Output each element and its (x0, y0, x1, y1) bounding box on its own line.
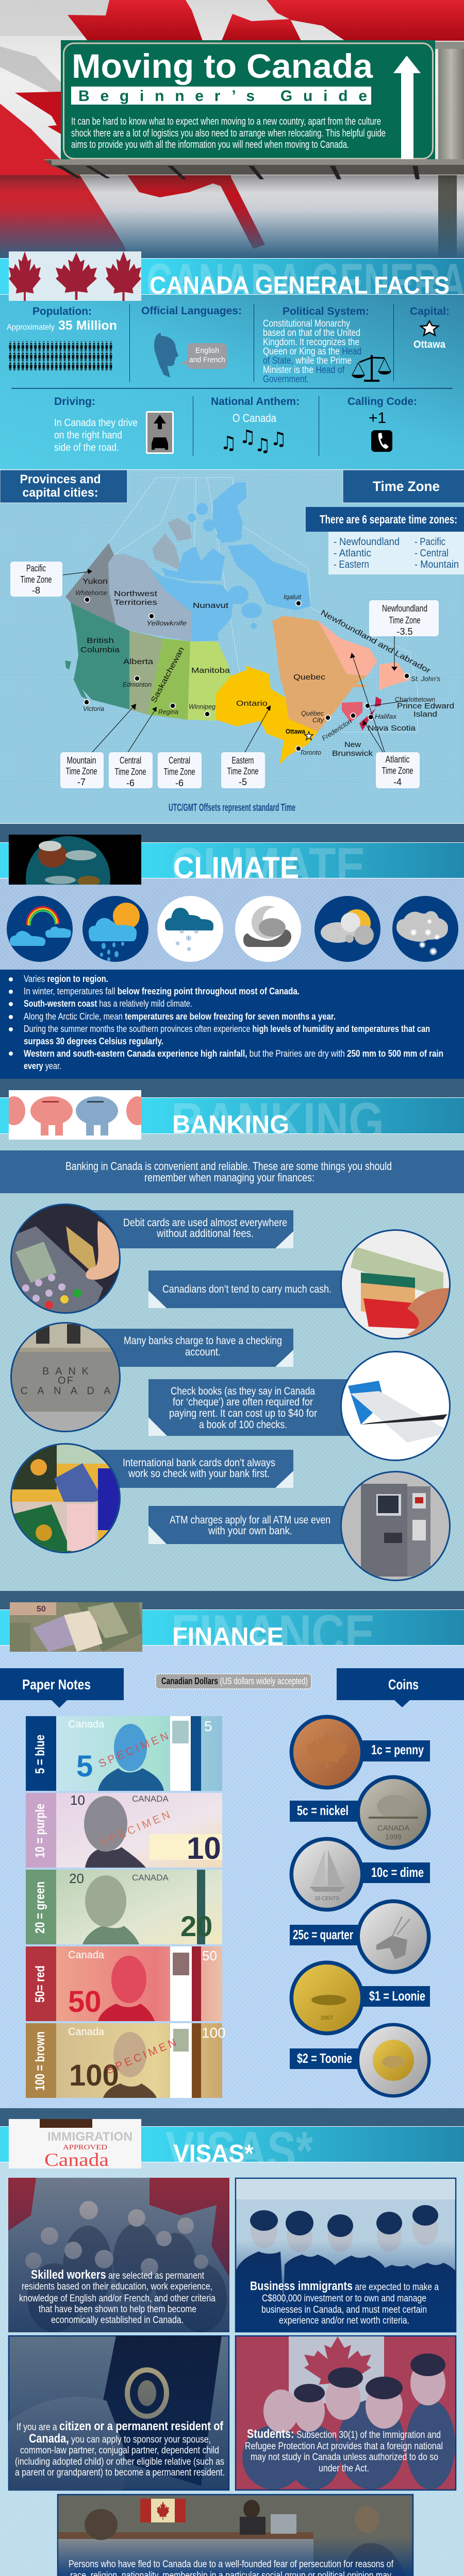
callout: newfoundland time zone (369, 600, 439, 637)
card: refugee claim (57, 2494, 413, 2576)
banknote: 5 dollar: Canada (68, 1719, 105, 1730)
map labels: provinces: Saskatchewan (150, 646, 186, 704)
photo: bank of canada building: OF (58, 1375, 73, 1386)
callout: mountain time zone: -7 (77, 777, 86, 787)
icon: scales (352, 355, 391, 382)
map labels: provinces: New (344, 740, 361, 749)
map labels: capital cities: Halifax (375, 713, 397, 720)
banking tip: cash: Canadians don’t tend to carry much cash. (162, 1283, 332, 1295)
fact: official languages: English (195, 346, 219, 355)
heading: provinces and capital cities: capital cities: (23, 486, 98, 500)
fact: official languages: and French (189, 355, 225, 364)
callout: eastern time zone: -5 (239, 777, 247, 787)
map labels: capital cities: Iqaluit (284, 593, 302, 601)
header image: banknotes (10, 1602, 142, 1652)
card: business immigrants: C$800,000 investment or to own and manage (262, 2293, 426, 2304)
callout: newfoundland time zone: Time Zone (389, 615, 421, 625)
fact: calling code: Calling Code: (347, 396, 417, 408)
intro text (71, 116, 386, 150)
photo: check book (340, 1351, 451, 1461)
coin: penny (290, 1715, 430, 1790)
banking tip: check books: paying rent. It can cost up to $40 for (169, 1408, 317, 1419)
card: skilled workers: that have been shown to help them become (39, 2304, 196, 2315)
title: Moving to Canada (72, 47, 373, 85)
banknote: 50 dollar: 50 (68, 1985, 102, 2019)
banknote: 5 dollar: 5 (204, 1718, 212, 1734)
climate facts list: Western and south-eastern Canada experience high rainfall, but the Prairies are dry with 250 mm to 500 mm of rain (24, 1048, 443, 1059)
map labels: capital cities: Yellowknife (146, 619, 187, 627)
card: business immigrants: businesses in Canada, and must meet certain (261, 2304, 427, 2315)
icon: snow cloud: ✻ (186, 934, 192, 942)
card: business immigrants: Business immigrants are expected to make a (250, 2279, 439, 2293)
heading: coins (337, 1668, 464, 1707)
map labels: provinces: Yukon (82, 577, 108, 586)
panel: provinces and time zone map (0, 469, 464, 824)
banknote: 20 dollar: 20 (69, 1871, 84, 1886)
callout: eastern time zone: Time Zone (227, 766, 259, 776)
map labels: capital cities (75, 589, 440, 756)
climate facts list: every year. (24, 1060, 61, 1071)
banknote: 20 dollar: 20 (180, 1910, 212, 1942)
heading: time zone: Time Zone (373, 479, 440, 494)
banknote: 50 dollar: Canada (68, 1950, 105, 1961)
map labels: capital cities: Ottawa (286, 727, 306, 735)
fact: population: 35 Million (58, 318, 117, 333)
fact: capital: Capital: (410, 306, 450, 317)
coin: quarter (290, 1899, 431, 1974)
fact: political system: Government. (263, 374, 309, 385)
climate facts list: Along the Arctic Circle, mean temperatures are below freezing for seven months a year. (24, 1011, 336, 1022)
sign platform (44, 160, 464, 179)
banknote: 5 dollar (26, 1716, 222, 1791)
fact: population (7, 306, 117, 370)
card: students (236, 2336, 456, 2490)
map labels: provinces: Island (413, 710, 437, 719)
map labels: capital cities: Charlottetown (395, 696, 435, 703)
fact: driving (54, 396, 173, 453)
header image: immigration approved: APPROVED (63, 2144, 107, 2151)
fact: calling code: +1 (369, 410, 386, 427)
banknote: 20 dollar: CANADA (132, 1873, 169, 1883)
arrows: time zone pointers (63, 569, 407, 752)
banking tip: check books: a book of 100 checks. (199, 1419, 287, 1431)
banking tip: debit cards: without additional fees. (156, 1228, 254, 1240)
callout: atlantic time zone: -4 (393, 777, 402, 787)
banknote: 10 dollar: SPECIMEN (98, 1808, 174, 1849)
fact: political system: Queen or King as the Head (263, 346, 361, 357)
banking tip: ATM charges (148, 1471, 451, 1581)
fact: political system: Constitutional Monarchy (263, 318, 350, 329)
coin: toonie: $2 = Toonie (297, 2050, 352, 2066)
banking tip: international cards (10, 1443, 293, 1553)
banking tip: checking account: account. (185, 1346, 221, 1358)
coin: nickel: 1999 (385, 1833, 402, 1841)
callout: central time zone 2 (158, 752, 202, 788)
icon: grey snow cloud: ✺ (429, 946, 438, 958)
banknote: 100 dollar (26, 2023, 226, 2098)
callout: six time zones: - Atlantic (334, 548, 371, 559)
map labels: provinces: Nunavut (193, 601, 229, 610)
panel: Canada general facts (0, 251, 464, 469)
intro text: aims to provide you with all the information you will need when moving to Canada. (71, 139, 349, 150)
map labels: capital cities: Fredericton (320, 717, 353, 742)
climate facts list: South-western coast has a relatively mild climate. (24, 998, 192, 1009)
coin: dime: 10 CENTS (314, 1896, 339, 1902)
banknote: 10 dollar (26, 1792, 222, 1868)
map labels: capital cities: City (312, 716, 324, 724)
icon: snow cloud: ✻ (179, 929, 184, 935)
coin: nickel: 5c = nickel (297, 1803, 349, 1818)
map note: UTC/GMT Offsets represent standard Time (169, 802, 295, 814)
banking tip: checking account (10, 1322, 293, 1432)
banknote: 100 dollar: 100 (202, 2025, 226, 2041)
heading: CLIMATE (173, 851, 299, 885)
callout: central time zone: Time Zone (114, 767, 146, 777)
photo: cash and cards (340, 1229, 451, 1340)
map labels: provinces: Prince Edward (397, 702, 454, 710)
banknote: 20 dollar (26, 1870, 222, 1944)
callout: six time zones (306, 507, 464, 574)
header image: immigration approved (9, 2119, 141, 2170)
callout: central time zone: Central (120, 755, 141, 766)
card: family sponsorship: a parent or grandparent) to become a permanent resident. (15, 2467, 225, 2478)
banknote: 10 dollar: 10 (187, 1831, 221, 1866)
header image: piggy banks (3, 1090, 149, 1140)
header image: maple leaves (9, 251, 141, 301)
panel: visas (0, 2108, 464, 2576)
map labels: capital cities: St. John's (411, 675, 440, 683)
card: skilled workers: knowledge of English and/or French, and other criteria (19, 2293, 216, 2304)
callout: eastern time zone (221, 752, 265, 788)
map labels: capital cities: Winnipeg (189, 703, 216, 710)
banking tip: ATM charges: with your own bank. (208, 1525, 292, 1537)
fact: national anthem: ♫ (220, 433, 237, 454)
banking tip: check books (148, 1351, 451, 1461)
banking tip: debit cards (10, 1204, 293, 1314)
heading: paper notes (0, 1668, 124, 1708)
map labels: provinces: Nova Scotia (368, 724, 416, 733)
banking tip: ATM charges: ATM charges apply for all ATM use even (170, 1514, 330, 1526)
map labels: provinces (80, 577, 454, 758)
callout: mountain time zone: Mountain (67, 755, 96, 766)
coin: nickel (290, 1775, 431, 1850)
callout: atlantic time zone: Time Zone (382, 766, 413, 776)
map labels: provinces: Newfoundland and Labrador (319, 608, 432, 675)
callout: six time zones: - Pacific (415, 536, 445, 548)
intro box (0, 1150, 464, 1193)
card: refugee claim: Persons who have fled to Canada due to a well-founded fear of persecution for reasons of (69, 2559, 394, 2570)
banknote: 50 dollar: 50= red (33, 1965, 47, 2003)
banking tip: check books: Check books (as they say in Canada (171, 1385, 315, 1397)
banking tip: checking account: Many banks charge to have a checking (124, 1335, 282, 1347)
map of Canada (65, 482, 454, 765)
header image: banknotes: 50 (37, 1605, 46, 1614)
fact: official languages: Official Languages: (141, 305, 242, 317)
callout: central time zone: -6 (126, 778, 135, 788)
fact: national anthem: National Anthem: (211, 396, 300, 408)
photo: bank of canada building (10, 1322, 121, 1432)
card: family sponsorship: common-law partner, conjugal partner, dependent child (20, 2445, 219, 2456)
fact: calling code (347, 396, 417, 452)
subtitle: beginner's guide: Beginner’s Guide (78, 88, 367, 105)
callout: six time zones: - Eastern (334, 559, 369, 570)
card: family sponsorship: Canada, you can apply to sponsor your spouse, (29, 2432, 211, 2446)
callout: newfoundland time zone: -3.5 (396, 626, 413, 637)
banking tip: check books: for ‘cheque’) are often required for (173, 1396, 313, 1408)
banking tip: international cards: work so check with your bank first. (128, 1468, 270, 1480)
banknote: 50 dollar: 50 (202, 1948, 217, 1963)
icon: grey snow cloud: ✺ (419, 940, 426, 950)
heading: paper notes: Paper Notes (22, 1676, 91, 1692)
callout: pacific time zone: Time Zone (21, 574, 52, 585)
icon: snow cloud: ✻ (175, 941, 180, 947)
fact: national anthem: O Canada (233, 412, 277, 425)
banknote: 100 dollar: SPECIMEN (105, 2036, 180, 2077)
banknote: 10 dollar: CANADA (132, 1794, 169, 1804)
callout: canadian dollars (156, 1674, 311, 1689)
card: skilled workers: Skilled workers are selected as permanent (31, 2268, 205, 2282)
fact: capital (410, 306, 450, 350)
climate facts list: surpass 30 degrees Celsius regularly. (24, 1036, 163, 1046)
photo: bank of canada building: BANK (42, 1366, 89, 1377)
banknote: 100 dollar: 100 = brown (33, 2031, 47, 2091)
fact: national anthem: ♫ (254, 435, 271, 456)
icon: grey snow cloud: ✺ (410, 928, 417, 938)
icon: grey snow cloud: ✺ (427, 918, 432, 925)
icon: grey snow cloud: ✺ (434, 933, 440, 941)
fact: population: Approximately (7, 323, 55, 332)
icon: sun and rain (82, 896, 148, 962)
banknote: 20 dollar: 20 = green (33, 1882, 47, 1934)
banking tip: debit cards: Debit cards are used almost everywhere (123, 1217, 287, 1229)
callout: six time zones: - Mountain (415, 559, 459, 570)
icon: grey snow cloud (392, 896, 458, 962)
highway sign panel (44, 40, 464, 160)
banknote: 10 dollar: 10 = purple (33, 1804, 47, 1858)
fact: capital: Ottawa (413, 339, 446, 350)
map labels: provinces: Ontario (236, 699, 268, 708)
fact: driving: on the right hand (54, 430, 122, 441)
map labels: provinces: Quebec (293, 673, 326, 682)
callout: atlantic time zone: Atlantic (386, 754, 409, 765)
map labels: capital cities: Victoria (83, 705, 104, 713)
panel: banking (0, 1079, 464, 1591)
coin: penny: 1c = penny (371, 1742, 424, 1757)
climate facts list: During the summer months the southern provinces often experience high levels of humidity and temperatures that can (24, 1023, 430, 1034)
header image: immigration approved: Canada (44, 2149, 109, 2170)
intro box: remember when managing your finances: (144, 1171, 314, 1184)
banknote: 10 dollar: 10 (70, 1792, 85, 1808)
callout: central time zone 2: -6 (175, 778, 184, 788)
header image: immigration approved: IMMIGRATION (47, 2130, 132, 2144)
map labels: capital cities: Whitehorse (75, 589, 107, 597)
callout: canadian dollars: Canadian Dollars (US dollars widely accepted) (161, 1676, 308, 1686)
photo: bank of canada building: CANADA (21, 1385, 111, 1397)
icon: grey snow cloud: ✺ (424, 928, 432, 938)
fact: political system: Political System: (283, 306, 369, 317)
climate facts list: Varies region to region. (24, 973, 108, 984)
map labels: provinces: Manitoba (191, 666, 230, 675)
callout: pacific time zone: Pacific (26, 563, 46, 573)
panel: finance (0, 1591, 464, 2108)
card: family sponsorship (9, 2336, 229, 2490)
panel: climate (0, 824, 464, 1079)
photo: ATM (340, 1471, 451, 1581)
coin: toonie (290, 2023, 431, 2098)
intro box: Banking in Canada is convenient and reliable. These are some things you should (65, 1160, 392, 1173)
coin: dime: 10c = dime (371, 1865, 424, 1880)
heading: BANKING (172, 1111, 289, 1139)
header image: earth (9, 835, 141, 921)
card: family sponsorship: (including adopted child) or other eligible relative (such as (15, 2456, 224, 2467)
banknote: 100 dollar: Canada (68, 2026, 105, 2038)
icon: snow cloud: ✻ (187, 946, 191, 953)
fact: political system: Kingdom. It recognizes the (263, 337, 359, 348)
banknote: 50 dollar (26, 1946, 222, 2021)
banknote: 5 dollar: SPECIMEN (97, 1729, 173, 1770)
banknote: 5 dollar: 5 = blue (33, 1735, 47, 1774)
card: business immigrants (236, 2178, 456, 2332)
callout: atlantic time zone (376, 752, 420, 788)
callout: six time zones: - Newfoundland (334, 536, 400, 548)
map labels: provinces: Territories (114, 598, 157, 607)
map labels: provinces: Brunswick (332, 749, 373, 758)
fact: national anthem: ♫ (239, 427, 256, 448)
fact: driving: In Canada they drive (54, 417, 138, 429)
banknote: 100 dollar: 100 (69, 2059, 119, 2092)
heading: provinces and capital cities: Provinces and (20, 472, 101, 486)
icon: crescent moon and cloud (235, 896, 301, 962)
climate facts list (0, 970, 464, 1079)
heading: coins: Coins (388, 1676, 419, 1692)
callout: central time zone 2: Time Zone (164, 767, 195, 777)
fact: national anthem (211, 396, 300, 456)
heading: time zone (343, 470, 464, 503)
coin: nickel: CANADA (377, 1824, 409, 1833)
card: students: under the Act. (319, 2463, 369, 2474)
card: family sponsorship: If you are a citizen or a permanent resident of (16, 2419, 224, 2433)
callout: newfoundland time zone: Newfoundland (382, 603, 427, 614)
photo: payment terminal (10, 1204, 121, 1314)
heading: VISAS* (173, 2140, 254, 2167)
fact: political system: Minister is the Head of (263, 365, 345, 376)
coin: loonie: $1 = Loonie (369, 1988, 425, 2004)
card: skilled workers (8, 2178, 229, 2332)
callout: mountain time zone: Time Zone (66, 766, 97, 776)
climate facts list: In winter, temperatures fall below freezing point throughout most of Canada. (24, 986, 300, 996)
coin: loonie (290, 1961, 430, 2035)
icon: rainbow clouds (7, 896, 73, 962)
fact: political system (263, 306, 391, 385)
fact: official languages (141, 305, 242, 378)
map labels: capital cities: Toronto (300, 749, 321, 756)
heading: CANADA GENERAL FACTS (150, 272, 450, 299)
banknote: 5 dollar: 5 (76, 1750, 93, 1783)
map labels: provinces: British (87, 636, 114, 645)
callout: central time zone 2: Central (169, 755, 190, 766)
callout: central time zone (109, 752, 153, 788)
icon: sun and grey clouds (314, 896, 380, 962)
coin: dime (290, 1837, 430, 1911)
coin: loonie: 2007 (321, 2015, 333, 2021)
fact: driving: Driving: (54, 396, 95, 408)
card: skilled workers: economically established in Canada. (51, 2315, 184, 2326)
card: business immigrants: experience and/or net worth criteria. (279, 2315, 409, 2326)
fact: population: Population: (32, 306, 92, 317)
fact: political system: based on that of the United (263, 328, 360, 338)
fact: driving: side of the road. (54, 442, 119, 453)
fact: political system: of State, while the Prime (263, 355, 352, 366)
map labels: provinces: Alberta (123, 657, 154, 666)
callout: eastern time zone: Eastern (232, 755, 254, 766)
sign support column (435, 42, 464, 160)
photo: credit cards (10, 1443, 121, 1553)
map labels: capital cities: Edmonton (123, 681, 152, 688)
callout: pacific time zone (10, 562, 62, 597)
icon: snow cloud: ✻ (194, 929, 198, 935)
hero: flag background and highway sign (0, 0, 464, 258)
heading: FINANCE (172, 1623, 284, 1651)
banking tip: cash (148, 1229, 451, 1340)
arrow: up (393, 56, 421, 159)
map labels: provinces: Columbia (80, 646, 120, 654)
callout: pacific time zone: -8 (32, 585, 40, 596)
map labels: provinces: Northwest (114, 589, 158, 598)
icon: snow cloud (157, 896, 223, 962)
callout: six time zones: - Central (415, 548, 449, 559)
map labels: capital cities: Québec (301, 709, 324, 717)
map labels: capital cities: Regina (158, 708, 178, 716)
coin: quarter: 25c = quarter (293, 1927, 353, 1942)
banking tip: international cards: International bank cards don’t always (123, 1457, 275, 1469)
callout: mountain time zone (60, 752, 104, 788)
fact: national anthem: ♫ (270, 429, 287, 450)
card: skilled workers: residents based on their education, work experience, (22, 2281, 212, 2292)
heading: provinces and capital cities (0, 470, 127, 503)
